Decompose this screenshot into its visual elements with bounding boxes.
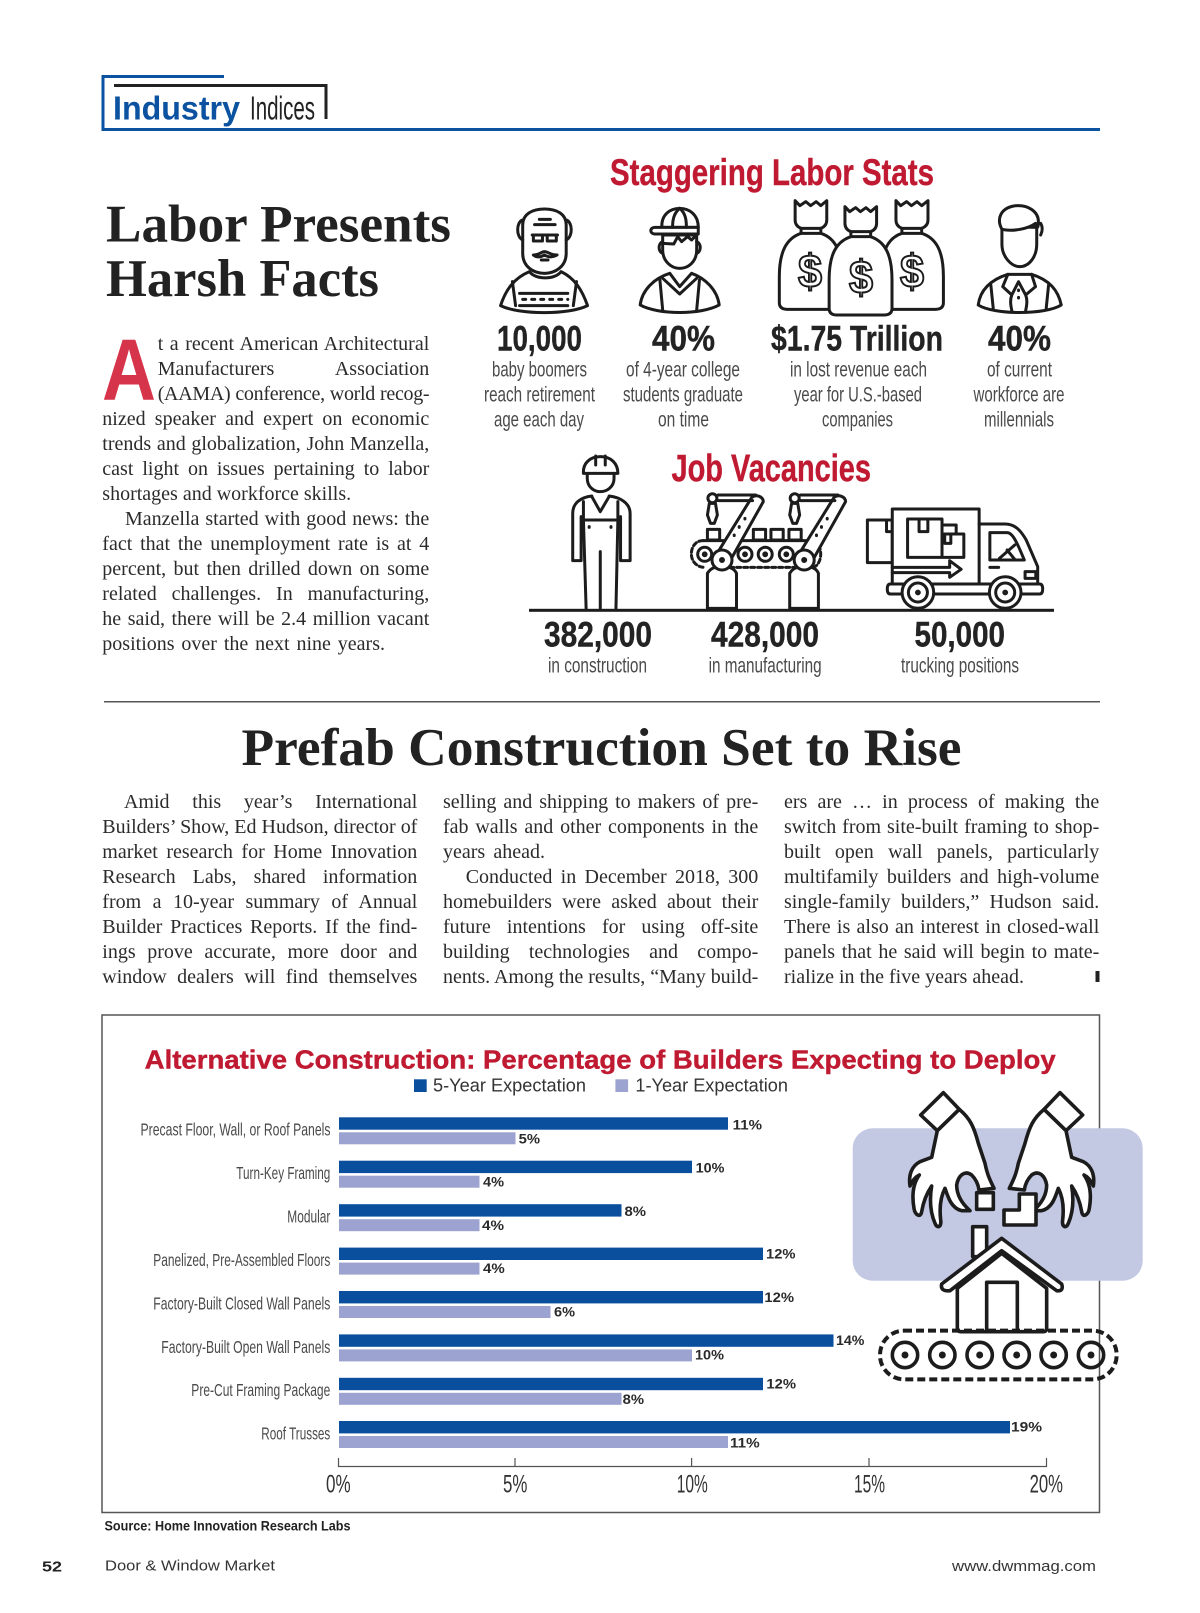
text block: Prefab column 2: building technologies and compo- bbox=[443, 941, 758, 963]
stat: 40% graduate on time: on time bbox=[658, 409, 709, 432]
stat: 40% millennials: millennials bbox=[984, 409, 1054, 432]
stat: 382,000 in construction bbox=[544, 616, 652, 677]
row: Roof Trusses: Roof Trusses bbox=[261, 1424, 330, 1444]
stat: 10,000 baby boomers: 10,000 bbox=[497, 320, 582, 359]
icon: robotic assembly line bbox=[691, 494, 846, 608]
row: Roof Trusses: 19% bbox=[1011, 1419, 1043, 1435]
chart source: Source: Home Innovation Research Labs bbox=[104, 1518, 351, 1534]
text block: Prefab column 1: Builders’ Show, Ed Hudson, director of bbox=[102, 816, 417, 838]
text block: Prefab column 3: single-family builders,” Hudson said. bbox=[784, 891, 1099, 913]
chart title: Alternative Construction: Percentage of Builders Expecting to Deploy bbox=[145, 1044, 1056, 1074]
row: Panelized, Pre-Assembled Floors: 4% bbox=[483, 1260, 505, 1276]
row: Factory-Built Closed Wall Panels bbox=[153, 1289, 795, 1319]
text block: Labor article body: he said, there will be 2.4 million vacant bbox=[102, 608, 429, 630]
text block: Labor article body: cast light on issues pertaining to labor bbox=[102, 458, 429, 480]
section header: Industry Indices bbox=[103, 76, 1100, 130]
stat: 428,000 in manufacturing: 428,000 bbox=[711, 616, 819, 655]
stat: $1.75 Trillion lost revenue bbox=[771, 320, 943, 432]
row: Factory-Built Open Wall Panels: 14% bbox=[836, 1332, 865, 1348]
row: Precast Floor, Wall, or Roof Panels: Precast Floor, Wall, or Roof Panels bbox=[140, 1120, 331, 1140]
row: Factory-Built Open Wall Panels: Factory-Built Open Wall Panels bbox=[161, 1337, 330, 1357]
icon: right hand bbox=[1009, 1093, 1094, 1227]
text block: Prefab column 3: There is also an interest in closed-wall bbox=[784, 916, 1099, 938]
stat: 10,000 baby boomers: age each day bbox=[494, 409, 584, 432]
text block: Prefab column 3: multifamily builders and high-volume bbox=[784, 866, 1099, 888]
text block: Prefab column 2: Conducted in December 2018, 300 bbox=[466, 866, 758, 888]
chart axis: 5% bbox=[503, 1470, 527, 1498]
row: Turn-Key Framing: 4% bbox=[483, 1174, 505, 1190]
row: Factory-Built Closed Wall Panels: 6% bbox=[554, 1303, 576, 1319]
stat: 40% graduate on time: of 4-year college bbox=[626, 359, 740, 382]
heading: Job Vacancies: Job Vacancies bbox=[672, 448, 871, 490]
row: Modular bbox=[287, 1203, 647, 1233]
text block: Labor article body: nized speaker and expert on economic bbox=[102, 408, 429, 430]
text block: Prefab column 1 bbox=[102, 791, 418, 988]
text block: Prefab column 1: window dealers will find themselves bbox=[102, 966, 417, 988]
text block: Prefab column 1: Amid this year’s International bbox=[124, 791, 417, 813]
text block: Prefab column 1: Research Labs, shared information bbox=[102, 866, 417, 888]
footer: www.dwmmag.com bbox=[951, 1558, 1096, 1575]
row: Roof Trusses bbox=[261, 1419, 1043, 1451]
text block: Labor article beside drop cap bbox=[158, 332, 429, 404]
stat: 382,000 in construction: in construction bbox=[548, 654, 647, 677]
text block: Labor article body bbox=[102, 408, 430, 654]
text block: Prefab column 1: market research for Home Innovation bbox=[102, 841, 417, 863]
row: Pre-Cut Framing Package bbox=[191, 1375, 797, 1407]
headline: Labor Presents Harsh Facts: Harsh Facts bbox=[106, 250, 379, 308]
text block: Labor article body: percent, but then drilled down on some bbox=[102, 558, 429, 580]
icon: conveyor belt bbox=[880, 1331, 1117, 1379]
text block: Prefab column 2: selling and shipping to makers of pre- bbox=[443, 791, 758, 813]
stat: 50,000 trucking positions: trucking positions bbox=[901, 654, 1019, 677]
chart axis: 15% bbox=[854, 1470, 885, 1498]
bar chart bbox=[140, 1116, 1043, 1451]
chart legend: 1-Year Expectation bbox=[635, 1075, 788, 1096]
stat: $1.75 Trillion lost revenue: companies bbox=[822, 409, 893, 432]
chart axis bbox=[326, 1458, 1063, 1498]
icon: money bags bbox=[779, 201, 943, 315]
text block: Prefab column 2: fab walls and other components in the bbox=[443, 816, 758, 838]
stat: 40% graduate on time: students graduate bbox=[623, 384, 743, 407]
text block: Prefab column 1: Builder Practices Reports. If the find- bbox=[102, 916, 417, 938]
drop cap A: A bbox=[102, 322, 156, 419]
icon: construction worker bbox=[573, 456, 630, 608]
headline: Prefab Construction Set to Rise: Prefab Construction Set to Rise bbox=[242, 719, 962, 777]
row: Turn-Key Framing: Turn-Key Framing bbox=[236, 1163, 330, 1183]
icon: small square block bbox=[977, 1193, 993, 1209]
footer bbox=[42, 1558, 1096, 1576]
text block: Prefab column 3: built open wall panels, particularly bbox=[784, 841, 1099, 863]
stat: $1.75 Trillion lost revenue: year for U.S.-based bbox=[794, 384, 922, 407]
stat: 40% millennials: of current bbox=[987, 359, 1052, 382]
stat: 428,000 in manufacturing: in manufacturing bbox=[709, 654, 822, 677]
footer: 52 bbox=[42, 1559, 62, 1576]
end mark bbox=[1096, 971, 1100, 982]
text block: Prefab column 1: from a 10-year summary of Annual bbox=[102, 891, 417, 913]
stat: 50,000 trucking positions bbox=[901, 616, 1019, 677]
section header: Industry Indices: Industry bbox=[113, 89, 241, 126]
icon: young man in cap bbox=[640, 208, 719, 312]
row: Turn-Key Framing: 10% bbox=[696, 1160, 725, 1176]
illustration: hands assembling house on conveyor bbox=[880, 1093, 1117, 1379]
stat: 10,000 baby boomers: baby boomers bbox=[492, 359, 587, 382]
text block: Prefab column 1: ings prove accurate, more door and bbox=[102, 941, 417, 963]
row: Precast Floor, Wall, or Roof Panels bbox=[140, 1116, 763, 1146]
text block: Prefab column 3: switch from site-built framing to shop- bbox=[784, 816, 1099, 838]
text block: Prefab column 3: ers are … in process of making the bbox=[784, 791, 1099, 813]
row: Pre-Cut Framing Package: 8% bbox=[623, 1391, 645, 1407]
chart axis: 20% bbox=[1030, 1470, 1063, 1498]
row: Panelized, Pre-Assembled Floors bbox=[153, 1246, 796, 1276]
stat: 382,000 in construction: 382,000 bbox=[544, 616, 652, 655]
stat: 10,000 baby boomers: reach retirement bbox=[484, 384, 595, 407]
row: Pre-Cut Framing Package: 12% bbox=[766, 1375, 797, 1391]
stat: 40% millennials: 40% bbox=[988, 320, 1051, 359]
chart axis: 10% bbox=[677, 1470, 708, 1498]
text block: Labor article body: trends and globalization, John Manzella, bbox=[102, 432, 429, 454]
section header: Industry Indices: Indices bbox=[250, 89, 315, 126]
text block: Prefab column 3: rialize in the five years ahead. bbox=[784, 966, 1024, 988]
row: Precast Floor, Wall, or Roof Panels: 11% bbox=[733, 1116, 763, 1132]
text block: Prefab column 2 bbox=[443, 791, 758, 988]
stat: 40% graduate on time: 40% bbox=[652, 320, 715, 359]
row: Pre-Cut Framing Package: Pre-Cut Framing Package bbox=[191, 1380, 330, 1400]
row: Panelized, Pre-Assembled Floors: Panelized, Pre-Assembled Floors bbox=[153, 1250, 330, 1270]
icon: money bags: $ bbox=[849, 251, 873, 303]
row: Factory-Built Open Wall Panels bbox=[161, 1332, 865, 1362]
text block: Prefab column 2: nents. Among the results, “Many build- bbox=[443, 966, 758, 988]
stat: 40% millennials bbox=[973, 320, 1064, 432]
text block: Labor article body: related challenges. In manufacturing, bbox=[102, 582, 429, 604]
text block: Prefab column 3 bbox=[784, 791, 1100, 988]
row: Modular: Modular bbox=[287, 1207, 330, 1227]
text block: Prefab column 2: future intentions for using off-site bbox=[443, 916, 758, 938]
icon: left hand bbox=[910, 1093, 994, 1227]
heading: Staggering Labor Stats: Staggering Labor Stats bbox=[610, 152, 934, 193]
text block: Prefab column 2: years ahead. bbox=[443, 841, 545, 863]
row: Turn-Key Framing bbox=[236, 1160, 725, 1190]
stat: $1.75 Trillion lost revenue: in lost revenue each bbox=[790, 359, 927, 382]
chart panel frame bbox=[102, 1015, 1100, 1512]
row: Modular: 4% bbox=[482, 1217, 505, 1233]
row: Roof Trusses: 11% bbox=[730, 1435, 760, 1451]
text block: Labor article beside drop cap: (AAMA) conference, world recog- bbox=[158, 382, 429, 404]
row: Precast Floor, Wall, or Roof Panels: 5% bbox=[519, 1130, 541, 1146]
row: Factory-Built Closed Wall Panels: 12% bbox=[764, 1289, 795, 1305]
stat: 40% graduate on time bbox=[623, 320, 743, 432]
stat: 50,000 trucking positions: 50,000 bbox=[914, 616, 1005, 655]
text block: Labor article body: Manzella started with good news: the bbox=[125, 508, 429, 530]
text block: Labor article body: shortages and workforce skills. bbox=[102, 482, 351, 504]
text block: Labor article beside drop cap: t a recent American Architectural bbox=[158, 332, 429, 354]
footer: Door & Window Market bbox=[105, 1558, 276, 1575]
text block: Labor article body: fact that the unemployment rate is at 4 bbox=[102, 532, 429, 554]
chart legend bbox=[414, 1075, 788, 1096]
icon: money bags: $ bbox=[900, 245, 924, 297]
icon: money bags: $ bbox=[798, 245, 822, 297]
text block: Labor article body: positions over the next nine years. bbox=[102, 632, 385, 654]
row: Panelized, Pre-Assembled Floors: 12% bbox=[766, 1246, 796, 1262]
icon: millennial man bbox=[978, 206, 1061, 312]
chart legend: 5-Year Expectation bbox=[433, 1075, 586, 1096]
icon: house bbox=[941, 1227, 1062, 1332]
illustration: lavender panel bbox=[853, 1128, 1143, 1281]
icon: delivery truck bbox=[867, 509, 1043, 608]
ground line bbox=[529, 609, 1054, 612]
icon: stepped block bbox=[1004, 1194, 1036, 1225]
row: Factory-Built Closed Wall Panels: Factory-Built Closed Wall Panels bbox=[153, 1293, 330, 1313]
text block: Prefab column 2: homebuilders were asked about their bbox=[443, 891, 758, 913]
text block: Labor article beside drop cap: Manufacturers Association bbox=[158, 358, 429, 380]
chart axis: 0% bbox=[326, 1470, 351, 1498]
stat: 40% millennials: workforce are bbox=[973, 384, 1064, 407]
row: Modular: 8% bbox=[624, 1203, 647, 1219]
icon: old man with beard bbox=[501, 209, 588, 313]
headline: Labor Presents Harsh Facts: Labor Presents bbox=[106, 196, 451, 254]
stat: 428,000 in manufacturing bbox=[709, 616, 822, 677]
stat: 10,000 baby boomers bbox=[484, 320, 595, 432]
headline: Labor Presents Harsh Facts bbox=[106, 196, 451, 308]
text block: Prefab column 3: panels that he said will begin to mate- bbox=[784, 941, 1099, 963]
row: Factory-Built Open Wall Panels: 10% bbox=[695, 1346, 725, 1362]
stat: $1.75 Trillion lost revenue: $1.75 Trillion bbox=[771, 320, 943, 359]
